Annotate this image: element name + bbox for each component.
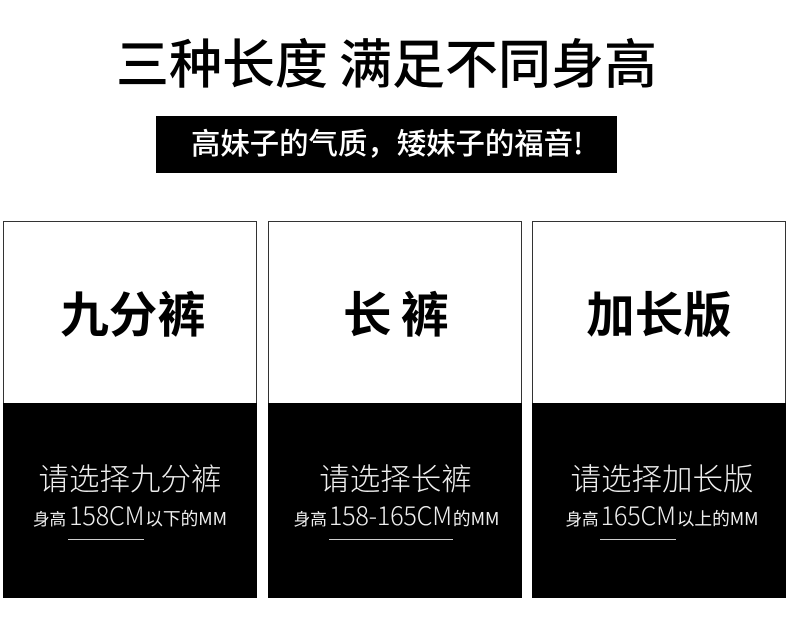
title: 三种长度 <box>116 23 328 99</box>
option text: 请选择加长版 <box>570 455 754 499</box>
black section <box>268 403 522 598</box>
title <box>116 23 657 99</box>
black section <box>532 403 786 598</box>
panel: 九分裤 <box>3 221 257 598</box>
panel: 长裤 <box>268 221 522 598</box>
underline <box>600 539 676 540</box>
height range: 身高158-165CM的MM <box>294 497 499 533</box>
heading: 九分裤: 九分裤 <box>60 276 206 346</box>
height range: 身高158CM以下的MM <box>33 497 227 533</box>
subtitle text: 高妹子的气质，矮妹子的福音! <box>191 121 583 163</box>
option text: 请选择长裤 <box>319 455 472 499</box>
black section <box>3 403 257 598</box>
title: 满足不同身高 <box>339 23 657 99</box>
heading: 长裤: 长 裤 <box>343 276 449 346</box>
height range: 身高165CM以上的MM <box>565 497 759 533</box>
underline <box>329 539 453 540</box>
subtitle banner <box>156 116 617 173</box>
underline <box>68 539 144 540</box>
heading: 加长版: 加长版 <box>586 276 732 346</box>
option text: 请选择九分裤 <box>38 455 222 499</box>
panel: 加长版 <box>532 221 786 598</box>
